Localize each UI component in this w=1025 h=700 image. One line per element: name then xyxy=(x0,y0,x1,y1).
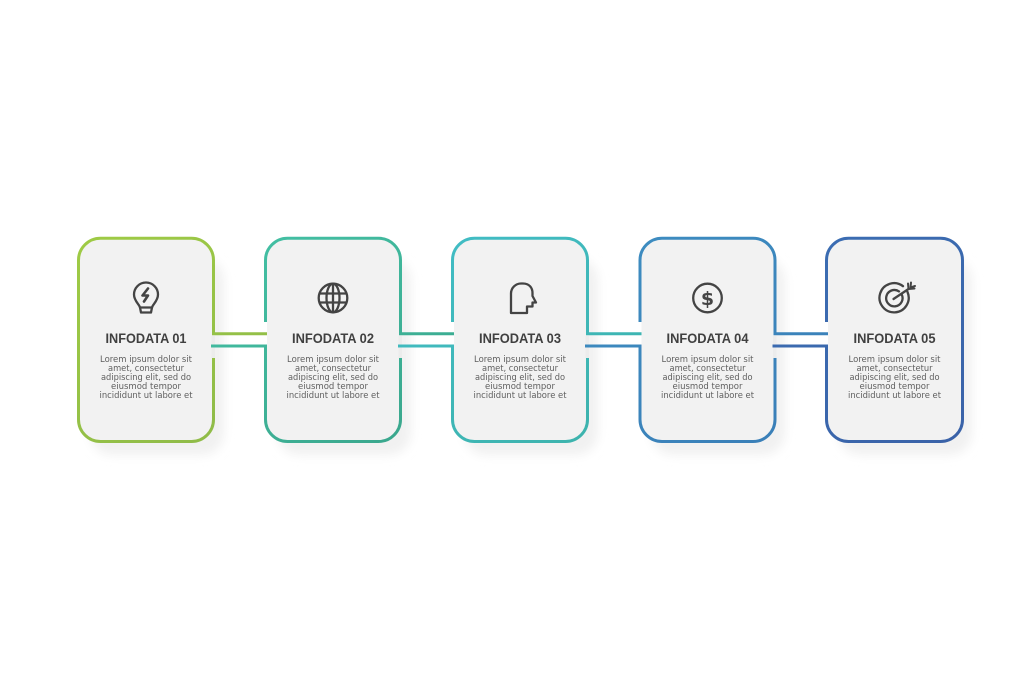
card shadows xyxy=(90,258,972,455)
icon: dollar coin xyxy=(693,284,722,312)
text block xyxy=(286,354,380,400)
text block: eiusmod tempor xyxy=(672,381,743,391)
text block: amet, consectetur xyxy=(670,363,746,373)
text block xyxy=(474,354,567,400)
text block: incididunt ut labore et xyxy=(474,390,567,400)
text block: eiusmod tempor xyxy=(860,381,930,391)
text block xyxy=(100,354,193,400)
text block: amet, consectetur xyxy=(108,363,185,373)
heading: INFODATA 02 xyxy=(292,330,374,346)
card outline and bottom connector 01 xyxy=(211,346,400,442)
panel: infodata 02 xyxy=(211,238,455,442)
panel: infodata 01 xyxy=(78,238,268,442)
card outline and bottom connector 04 xyxy=(772,238,962,442)
panel: infodata 05 xyxy=(772,238,962,442)
text block: adipiscing elit, sed do xyxy=(101,372,191,382)
card outline and top connector 03 xyxy=(452,238,642,334)
panel: infodata 04 xyxy=(585,238,829,442)
text block: Lorem ipsum dolor sit xyxy=(848,354,941,364)
heading: INFODATA 05 xyxy=(854,330,936,346)
card outline and top connector 04 xyxy=(640,238,829,334)
text block: amet, consectetur xyxy=(856,363,933,373)
icon: target with arrow xyxy=(879,282,915,312)
text block: incididunt ut labore et xyxy=(100,390,193,400)
text block: incididunt ut labore et xyxy=(848,390,942,400)
text block xyxy=(661,354,755,400)
heading: INFODATA 04 xyxy=(666,330,749,346)
text block: Lorem ipsum dolor sit xyxy=(287,354,380,364)
heading: INFODATA 01 xyxy=(106,330,187,346)
text block: Lorem ipsum dolor sit xyxy=(662,354,754,364)
card outline and top connector 01 xyxy=(78,238,268,442)
text block: Lorem ipsum dolor sit xyxy=(100,354,193,364)
icon: head profile xyxy=(511,284,536,313)
text block: incididunt ut labore et xyxy=(286,390,380,400)
text block: eiusmod tempor xyxy=(111,381,182,391)
text block: incididunt ut labore et xyxy=(661,390,755,400)
card outline and top connector 02 xyxy=(266,238,455,334)
card outline and bottom connector 02 xyxy=(398,346,588,442)
icon: light bulb xyxy=(134,282,158,312)
text block: amet, consectetur xyxy=(482,363,559,373)
text block: adipiscing elit, sed do xyxy=(662,372,752,382)
icon: globe xyxy=(319,284,347,312)
panel: infodata 03 xyxy=(398,238,642,442)
text block: Lorem ipsum dolor sit xyxy=(474,354,567,364)
icon: dollar coin: $ xyxy=(701,288,714,310)
text block: adipiscing elit, sed do xyxy=(850,372,940,382)
text block xyxy=(848,354,942,400)
text block: eiusmod tempor xyxy=(298,381,369,391)
text block: adipiscing elit, sed do xyxy=(475,372,565,382)
text block: adipiscing elit, sed do xyxy=(288,372,378,382)
heading: INFODATA 03 xyxy=(479,330,561,346)
text block: eiusmod tempor xyxy=(485,381,556,391)
card outline and bottom connector 03 xyxy=(585,346,775,442)
text block: amet, consectetur xyxy=(295,363,372,373)
